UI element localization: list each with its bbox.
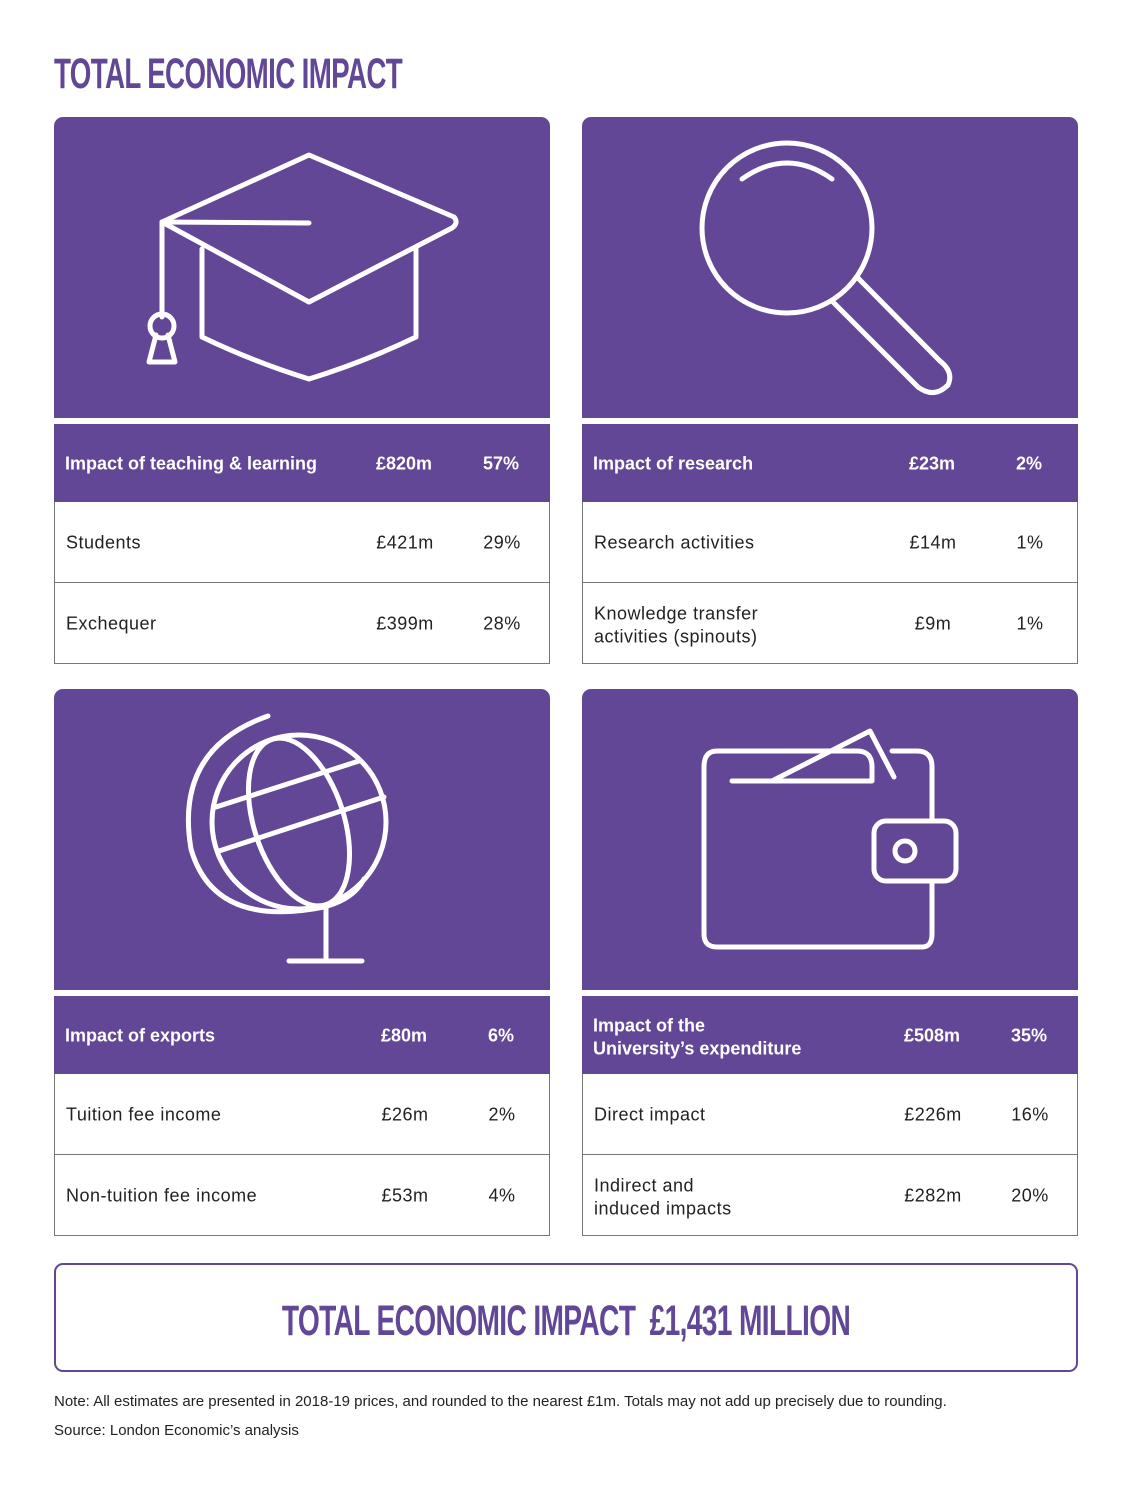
header row [54,424,550,502]
header row [582,996,1078,1074]
row: tuition: £26m [381,1105,429,1125]
row: knowledge transfer [582,583,1078,664]
row: non-tuition: 4% [488,1186,516,1206]
row: tuition: Tuition fee income [66,1105,221,1125]
row: indirect: Indirect and [594,1175,694,1195]
row: research activities: £14m [909,533,957,553]
row: exchequer: 28% [483,614,521,634]
row: exchequer: £399m [376,614,434,634]
header row: 57% [483,454,519,474]
header row: Impact of exports [65,1026,215,1046]
header row: Impact of the [593,1015,705,1035]
header row: Impact of research [593,454,753,474]
row: non-tuition: Non-tuition fee income [66,1186,257,1206]
row: students: £421m [376,533,434,553]
header row: 35% [1011,1026,1047,1046]
row: knowledge transfer: £9m [915,614,951,634]
row: tuition: 2% [488,1105,516,1125]
row: non-tuition: £53m [381,1186,429,1206]
row: non-tuition [54,1155,550,1236]
header row: £80m [381,1026,427,1046]
row: research activities: Research activities [594,533,755,553]
total callout: TOTAL ECONOMIC IMPACT £1,431 MILLION [282,1297,850,1345]
total callout [54,1263,1078,1372]
note: Note: All estimates are presented in 2018-19 prices, and rounded to the nearest £1m. Totals may not add up precisely due to rounding. [54,1393,947,1410]
header row [54,996,550,1074]
panel: research [582,117,1078,664]
header row [582,424,1078,502]
row: indirect: induced impacts [594,1198,732,1218]
row: knowledge transfer: Knowledge transfer [594,603,758,623]
header row: £508m [904,1026,960,1046]
row: knowledge transfer: activities (spinouts) [594,626,758,646]
row: students [54,502,550,583]
panel: teaching & learning [54,117,550,664]
row: knowledge transfer: 1% [1016,614,1044,634]
row: students: Students [66,533,141,553]
icon: globe [54,689,550,990]
header row: £23m [909,454,955,474]
row: exchequer [54,583,550,664]
header row: Impact of teaching & learning [65,454,317,474]
header row: 2% [1016,454,1042,474]
header row: University’s expenditure [593,1038,801,1058]
row: research activities: 1% [1016,533,1044,553]
icon: graduation cap [54,117,550,418]
icon: wallet [582,689,1078,990]
source: Source: London Economic’s analysis [54,1422,299,1439]
icon: magnifying glass [582,117,1078,418]
row: research activities [582,502,1078,583]
panel: exports [54,689,550,1236]
row: tuition [54,1074,550,1155]
header row: £820m [376,454,432,474]
row: direct: Direct impact [594,1105,706,1125]
row: direct [582,1074,1078,1155]
row: indirect: 20% [1011,1186,1049,1206]
row: exchequer: Exchequer [66,614,157,634]
row: indirect: £282m [904,1186,962,1206]
title: TOTAL ECONOMIC IMPACT [54,50,402,98]
panel: expenditure [582,689,1078,1236]
header row: 6% [488,1026,514,1046]
row: students: 29% [483,533,521,553]
row: direct: 16% [1011,1105,1049,1125]
row: indirect [582,1155,1078,1236]
row: direct: £226m [904,1105,962,1125]
